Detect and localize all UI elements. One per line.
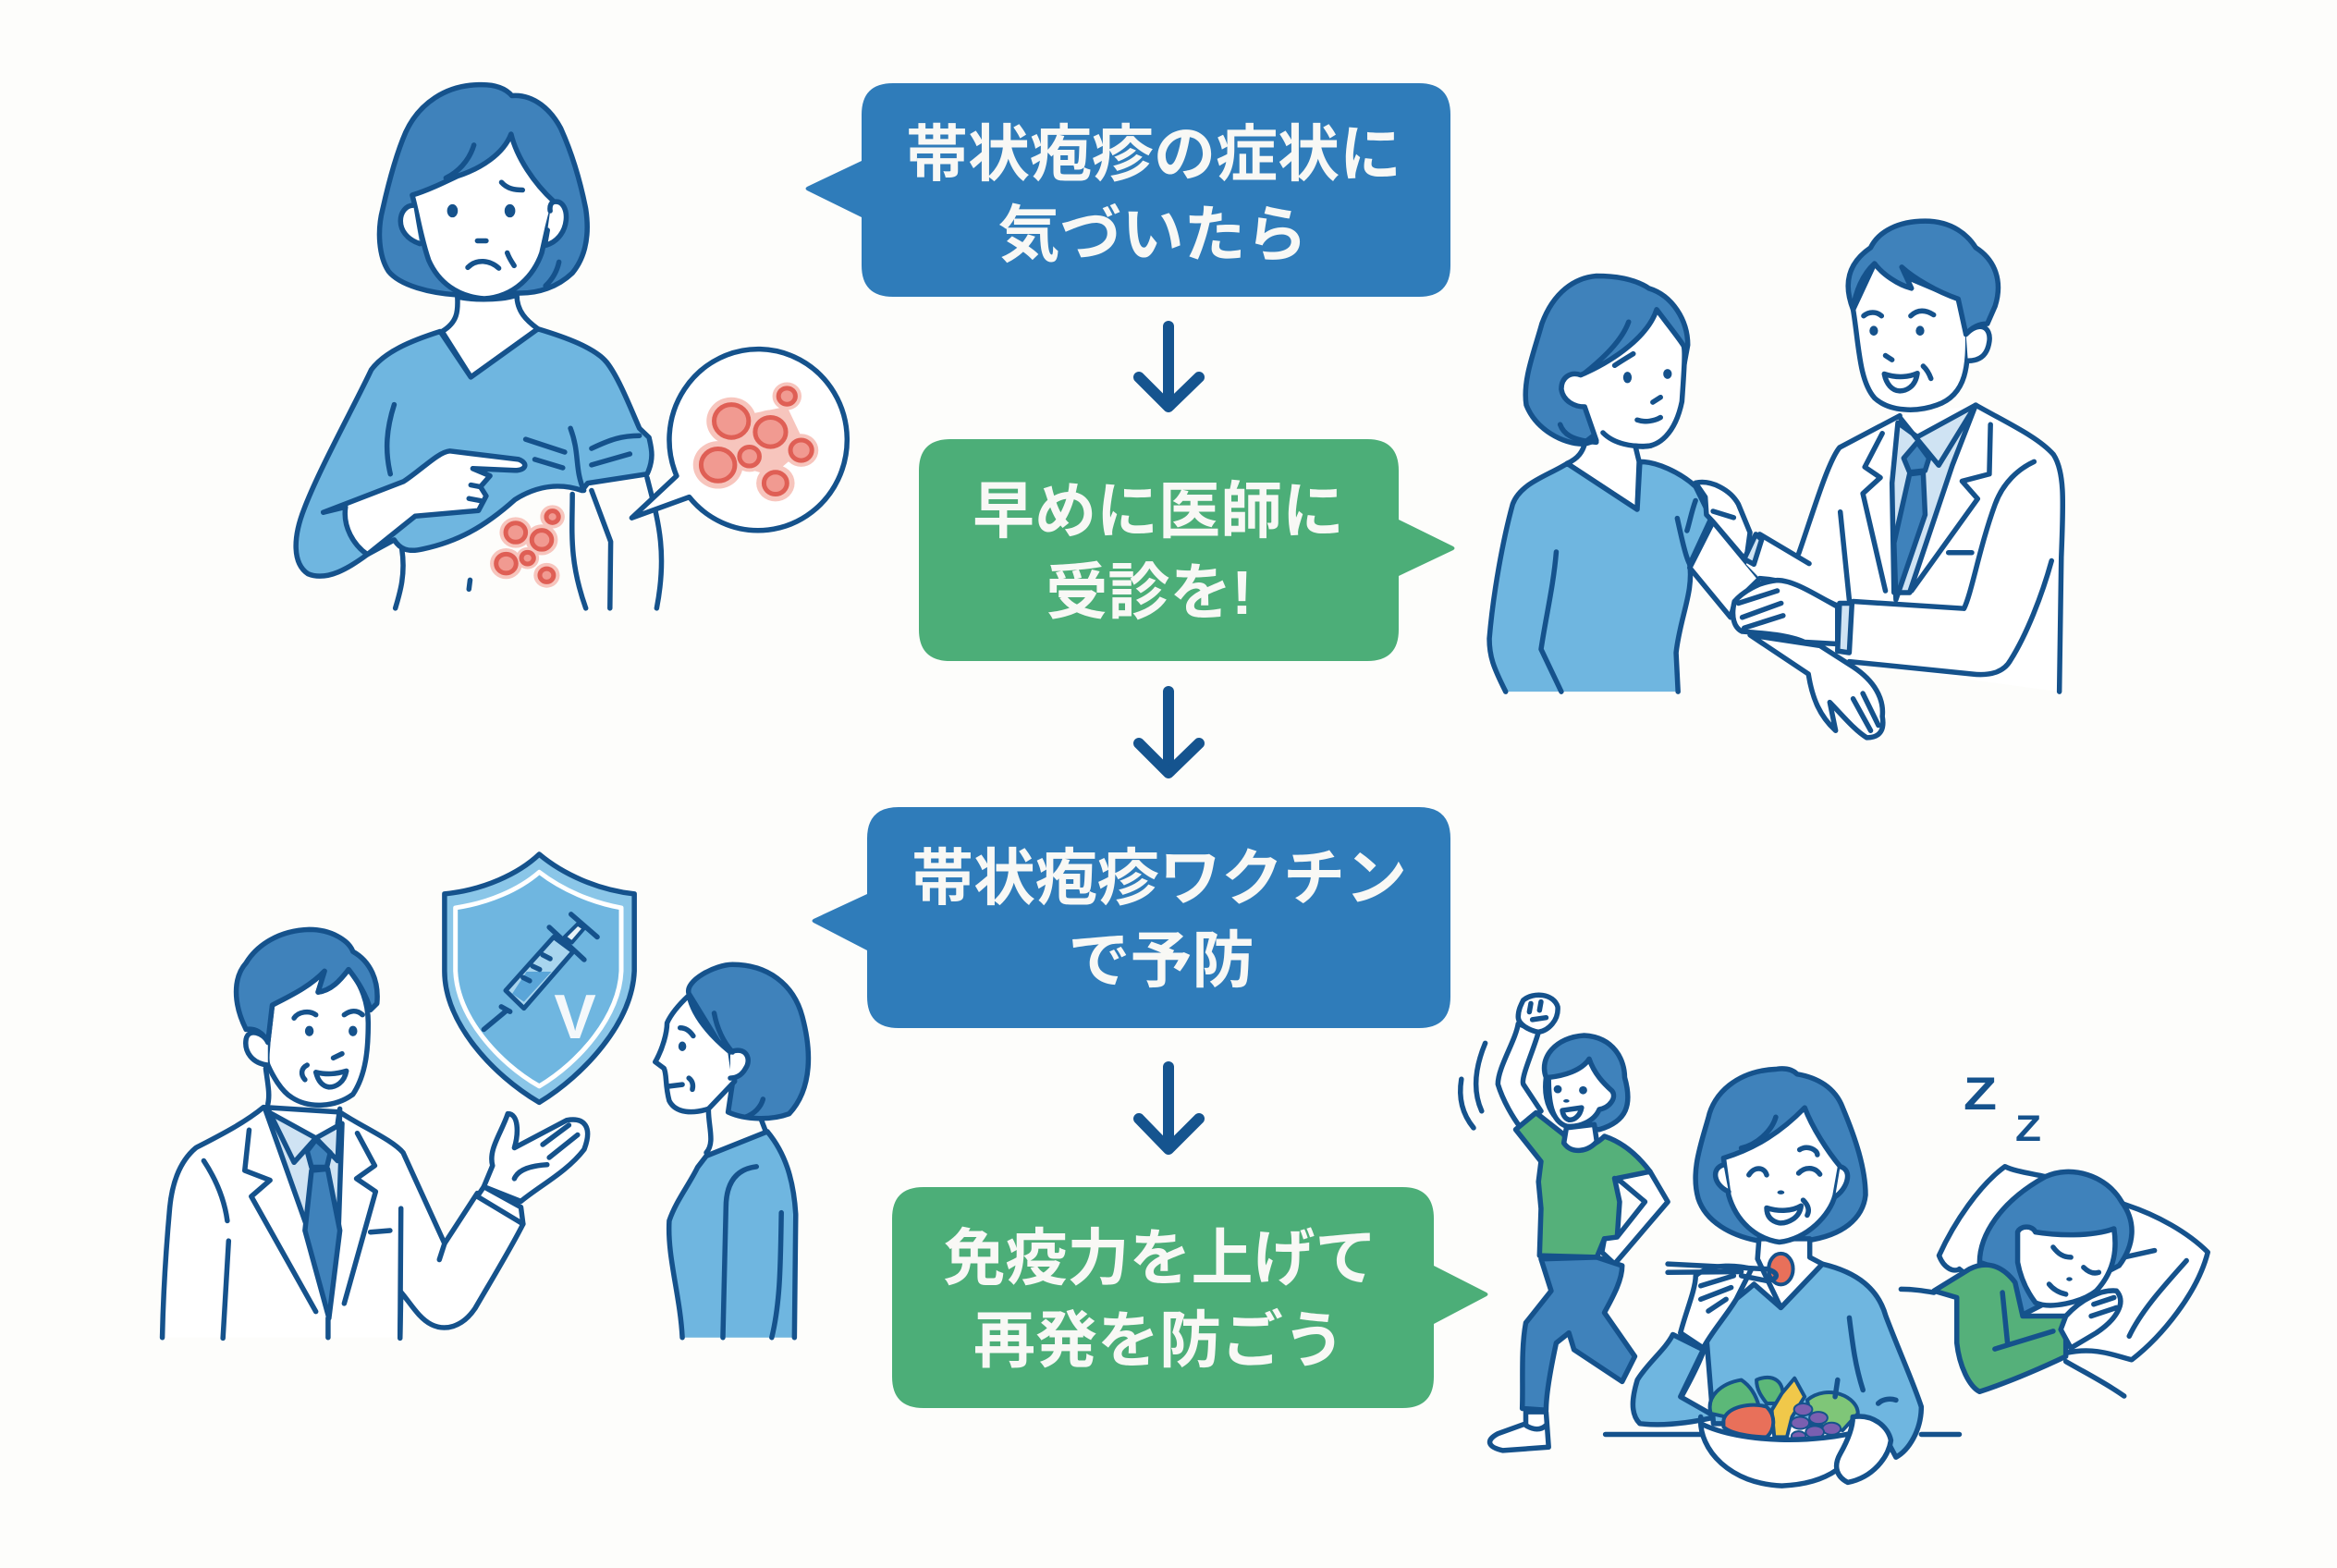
doctor hand holding arm xyxy=(1733,581,1838,643)
illustration: doctor examining patient's arm xyxy=(1489,221,2062,738)
face xyxy=(412,134,554,299)
doctor head xyxy=(1848,221,1998,410)
illustration: worried woman pointing at rash xyxy=(296,85,847,608)
arrow: step 1 to step 2 xyxy=(1139,326,1199,407)
arrow: step 3 to step 4 xyxy=(1139,1067,1199,1149)
magnified callout xyxy=(631,349,847,531)
salad xyxy=(1710,1380,1759,1417)
step 2 bubble: see a doctor early xyxy=(919,439,1455,661)
doctor cuff xyxy=(1838,603,1852,653)
doctor hand on shoulder xyxy=(1695,483,1762,564)
pointing hand xyxy=(324,451,525,555)
step 4 bubble: boost immunity xyxy=(892,1187,1488,1408)
step 4 bubble: boost immunity: 再発を防ごう xyxy=(973,1306,1345,1376)
doctor shirt xyxy=(265,1110,342,1227)
doctor open hand xyxy=(477,1114,588,1224)
step 2 bubble: see a doctor early: 受診を! xyxy=(1046,558,1253,628)
doctor tie xyxy=(1894,442,1929,600)
woman shirt xyxy=(669,1132,796,1338)
step 4 bubble: boost immunity: 免疫力を上げて xyxy=(943,1224,1377,1293)
doctor shirt xyxy=(1892,405,1976,593)
torso lines xyxy=(396,549,403,608)
step 2 bubble: see a doctor early: 早めに医師に xyxy=(973,477,1344,546)
patient face xyxy=(1561,310,1684,509)
patient hair xyxy=(1525,276,1688,444)
step 3 bubble: prevent with vaccine: で予防 xyxy=(1069,926,1254,996)
step 1 bubble: notice symptoms: 帯状疱疹の症状に xyxy=(906,120,1401,190)
food on fork xyxy=(1768,1254,1793,1284)
doctor coat xyxy=(1746,405,2062,692)
doctor coat xyxy=(163,1108,523,1338)
doctor head xyxy=(237,929,377,1123)
shield xyxy=(445,854,634,1102)
shirt xyxy=(296,329,652,576)
table xyxy=(1606,1432,1703,1437)
step 3 bubble: prevent with vaccine: 帯状疱疹ワクチン xyxy=(912,844,1407,913)
woman head xyxy=(655,964,808,1153)
patient arm xyxy=(1690,521,1760,618)
sleeping woman xyxy=(1901,1167,2208,1396)
doctor tie xyxy=(305,1140,340,1318)
lower patient forearm xyxy=(1750,635,1883,738)
patient shirt xyxy=(1489,461,1711,692)
step 1 bubble: notice symptoms xyxy=(806,83,1450,297)
bowl xyxy=(1701,1417,1863,1486)
illustration: exercise, healthy meal and sleep xyxy=(1461,995,2208,1486)
sleep symbol Z large: Z xyxy=(1964,1068,1997,1120)
illustration: doctor explaining vaccine to woman xyxy=(163,854,808,1338)
step 3 bubble: prevent with vaccine xyxy=(812,807,1450,1028)
exercising woman xyxy=(1461,995,1668,1451)
step 1 bubble: notice symptoms: 気づいたら xyxy=(998,201,1307,270)
syringe xyxy=(483,914,597,1029)
arrow: step 2 to step 3 xyxy=(1139,692,1199,773)
rash on body xyxy=(490,505,565,588)
shield letter V: V xyxy=(554,982,596,1052)
hair xyxy=(379,85,587,295)
eating woman xyxy=(1606,1069,1959,1486)
sleep symbol Z small: Z xyxy=(2015,1109,2041,1149)
